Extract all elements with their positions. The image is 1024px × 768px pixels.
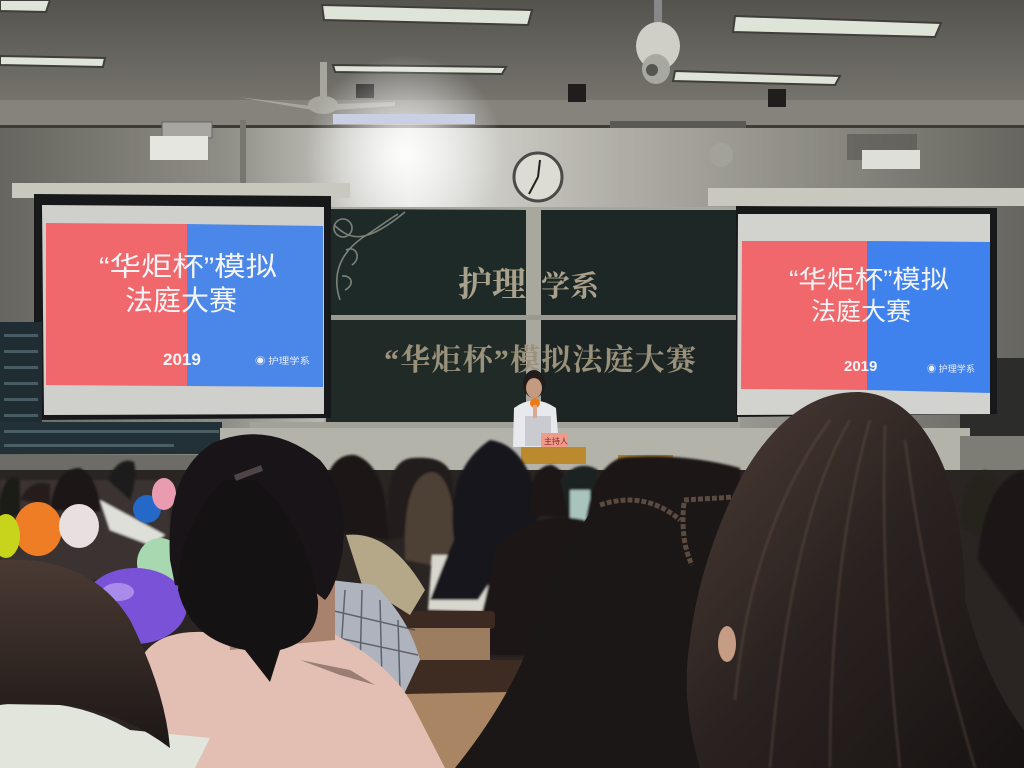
projectors — [150, 122, 920, 169]
chalk text: department: 护理 — [458, 266, 526, 304]
distant audience — [0, 440, 1024, 655]
projector screen housings — [12, 183, 1024, 206]
light glow above board — [305, 55, 505, 255]
right screen — [736, 206, 997, 417]
security camera — [636, 0, 680, 84]
chalk tray and lower wall — [0, 422, 1024, 768]
left screen title: 法庭大赛 — [125, 285, 237, 316]
ceiling fixtures — [238, 0, 786, 128]
left screen — [34, 194, 331, 420]
ceiling lights — [0, 0, 941, 85]
ear — [718, 626, 736, 662]
right screen logo: ◉ 护理学系 — [927, 363, 975, 374]
wall clock — [514, 153, 562, 201]
back wall — [0, 128, 1024, 468]
audience: foreground left head — [0, 560, 210, 768]
balloons — [0, 478, 187, 644]
chalk text: department: 学系 — [541, 270, 600, 303]
chalk text: department — [458, 266, 600, 304]
ceiling fan — [238, 62, 395, 114]
audience: girl with ponytail in pink jacket — [143, 434, 445, 768]
right screen year: 2019 — [844, 358, 877, 375]
podium: 主持人 — [544, 436, 568, 446]
podium — [521, 433, 586, 464]
right dark door panel — [960, 358, 1024, 436]
audience: foreground right head with long hair — [687, 392, 1024, 768]
chalk floral decoration — [334, 212, 405, 300]
small speakers — [356, 84, 786, 107]
right screen title: “华炬杯”模拟 — [789, 266, 949, 294]
left screen title: “华炬杯”模拟 — [99, 252, 277, 282]
chalk text: event name: “华炬杯”模拟法庭大赛 — [384, 344, 698, 377]
left side audience — [50, 468, 100, 512]
left screen title — [99, 252, 277, 316]
right screen title: 法庭大赛 — [811, 298, 911, 326]
left screen year: 2019 — [163, 350, 201, 369]
ceiling — [0, 0, 1024, 129]
right screen title — [789, 266, 949, 326]
audience: checked shirt and beige bag — [318, 535, 425, 692]
left screen logo: ◉ 护理学系 — [255, 355, 310, 366]
desk rows — [390, 611, 528, 768]
speaker at podium — [513, 370, 673, 464]
blackboard — [324, 207, 740, 423]
left wall seat-number panel — [0, 322, 222, 454]
audience: middle foreground long hair — [455, 477, 760, 768]
